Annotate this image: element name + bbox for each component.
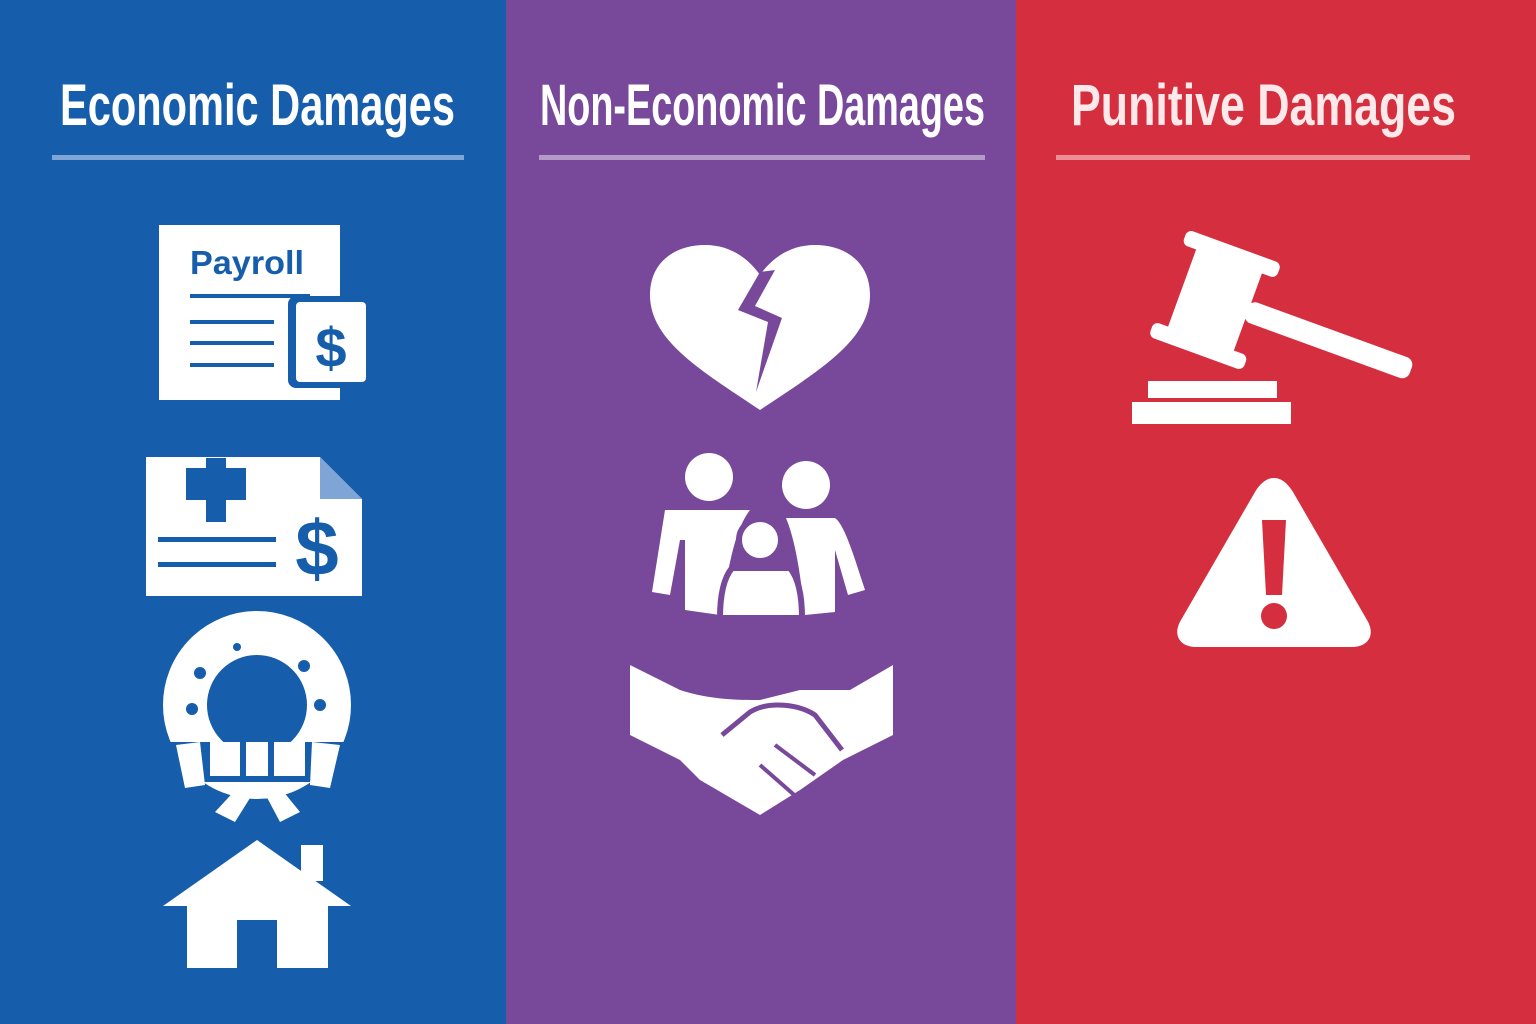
icon: handshake bbox=[630, 665, 893, 815]
heading: economic damages: Economic Damages bbox=[60, 73, 455, 138]
panel: non-economic damages bbox=[506, 0, 1016, 1024]
icon: house bbox=[163, 840, 351, 968]
icon: family bbox=[652, 453, 865, 618]
icon: funeral wreath bbox=[160, 633, 355, 822]
heading: non-economic damages: Non-Economic Damages bbox=[540, 73, 985, 138]
icon: medical bill: $ bbox=[295, 504, 339, 592]
icon: medical bill bbox=[146, 457, 362, 596]
icon: gavel bbox=[1132, 229, 1430, 425]
icon: payroll document bbox=[159, 225, 370, 400]
panel: punitive damages bbox=[1016, 0, 1536, 1024]
panel: economic damages bbox=[0, 0, 506, 1024]
icon: payroll document: Payroll bbox=[190, 244, 304, 281]
icon: warning triangle bbox=[1177, 478, 1371, 647]
icon: broken heart bbox=[650, 245, 870, 410]
icon: payroll document: $ bbox=[315, 316, 347, 379]
